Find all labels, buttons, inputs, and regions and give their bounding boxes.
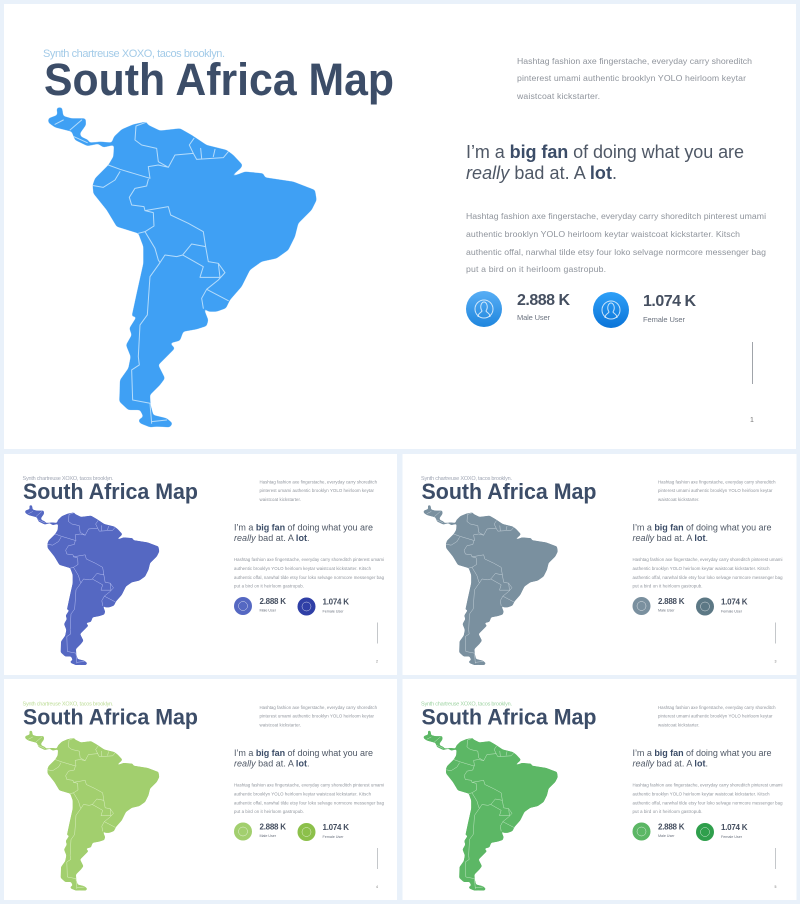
stat: male user: 2.888 K (517, 292, 570, 309)
panel: light green slide: Female User (322, 835, 344, 839)
panel: slate slide: Synth chartreuse XOXO, tacos brooklyn. (421, 476, 512, 482)
body paragraph: put a bird on it heirloom gastropub. (466, 264, 606, 274)
panel: indigo slide: Male User (260, 608, 277, 612)
panel: indigo slide: put a bird on it heirloom gastropub. (234, 584, 304, 588)
panel: light green slide: put a bird on it heirloom gastropub. (234, 809, 304, 814)
panel: indigo slide: 2.888 K (260, 597, 286, 606)
panel: main blue slide (4, 4, 796, 449)
panel: green slide: really bad at. A lot. (632, 758, 708, 768)
panel: light green slide: 1.074 K (322, 823, 349, 832)
panel: slate slide: waistcoat kickstarter. (658, 497, 700, 502)
panel: indigo slide: South Africa Map (23, 479, 198, 504)
intro paragraph (516, 56, 752, 101)
body paragraph: authentic offal, narwhal tilde etsy four loko selvage normcore messenger bag (466, 247, 766, 257)
panel: light green slide: Hashtag fashion axe fingerstache, everyday carry shoreditch pinterest umami (234, 782, 384, 788)
subtitle: Synth chartreuse XOXO, tacos brooklyn. (43, 48, 225, 60)
panel: slate slide: authentic brooklyn YOLO heirloom keytar waistcoat kickstarter. Kitsch (632, 566, 770, 571)
panel: slate slide: really bad at. A lot. (632, 533, 708, 543)
panel: slate slide: Female User (721, 610, 743, 614)
panel: slate slide: authentic offal, narwhal tilde etsy four loko selvage normcore messenger bag (632, 575, 783, 580)
panel: indigo slide: 2 (376, 660, 378, 664)
panel: green slide: Female User (721, 835, 743, 839)
stat: female user: Female User (643, 315, 686, 324)
panel: green slide: 2.888 K (658, 822, 685, 832)
panel: light green slide: authentic offal, narwhal tilde etsy four loko selvage normcore messenger bag (234, 800, 385, 806)
panel: green slide: I’m a big fan of doing what you are (632, 748, 772, 758)
panel: indigo slide (4, 454, 397, 675)
page number: 1 (750, 417, 754, 424)
panel: green slide: Synth chartreuse XOXO, tacos brooklyn. (421, 702, 512, 708)
panel: slate slide (402, 454, 796, 675)
panel: indigo slide: Synth chartreuse XOXO, tacos brooklyn. (22, 476, 114, 482)
panel: green slide: put a bird on it heirloom gastropub. (632, 809, 702, 814)
panel: indigo slide: Hashtag fashion axe fingerstache, everyday carry shoreditch (260, 480, 378, 484)
panel: green slide: Hashtag fashion axe fingerstache, everyday carry shoreditch pinterest umami (632, 782, 783, 788)
intro paragraph: Hashtag fashion axe fingerstache, everyday carry shoreditch (517, 56, 752, 66)
quote: really bad at. A lot. (466, 163, 617, 183)
panel: light green slide: really bad at. A lot. (234, 758, 310, 768)
panel: light green slide (4, 679, 397, 900)
stat: female user (593, 292, 696, 328)
panel: indigo slide: authentic brooklyn YOLO heirloom keytar waistcoat kickstarter. Kitsch (234, 566, 372, 571)
panel: slate slide: 1.074 K (721, 598, 748, 606)
panel: indigo slide: waistcoat kickstarter. (260, 497, 301, 502)
panel: green slide: waistcoat kickstarter. (658, 722, 700, 728)
panel: green slide: authentic brooklyn YOLO heirloom keytar waistcoat kickstarter. Kitsch (632, 792, 770, 796)
panel: light green slide: waistcoat kickstarter. (260, 722, 301, 728)
panel: light green slide: I’m a big fan of doing what you are (234, 748, 373, 758)
panel: indigo slide: really bad at. A lot. (234, 533, 310, 543)
panel: green slide: Hashtag fashion axe fingerstache, everyday carry shoreditch (658, 705, 776, 710)
body paragraph (466, 211, 766, 274)
panel: light green slide: South Africa Map (23, 704, 198, 730)
title: South Africa Map (44, 54, 394, 105)
panel: green slide: Male User (658, 834, 675, 838)
intro paragraph: pinterest umami authentic brooklyn YOLO heirloom keytar (517, 73, 746, 83)
quote (466, 142, 744, 183)
panel: indigo slide: Female User (322, 610, 344, 614)
panel: green slide: South Africa Map (422, 704, 596, 730)
panel: green slide (402, 679, 796, 900)
panel: light green slide: 4 (376, 885, 378, 889)
panel: light green slide: Synth chartreuse XOXO, tacos brooklyn. (22, 702, 114, 708)
panel: indigo slide: 1.074 K (322, 598, 349, 606)
panel: slate slide: South Africa Map (422, 479, 596, 504)
panel: slate slide: 2.888 K (658, 597, 685, 606)
stat: female user: 1.074 K (643, 293, 696, 310)
stat: male user: Male User (517, 313, 550, 322)
panel: slate slide: Hashtag fashion axe fingerstache, everyday carry shoreditch (658, 480, 776, 484)
panel: indigo slide: I’m a big fan of doing what you are (234, 522, 373, 532)
panel: slate slide: 3 (774, 660, 776, 664)
map: South America (48, 107, 317, 427)
panel: slate slide: Hashtag fashion axe fingerstache, everyday carry shoreditch pinterest umami (632, 557, 783, 562)
panel: green slide: 1.074 K (721, 823, 748, 832)
panel: light green slide: 2.888 K (260, 822, 286, 832)
panel: green slide: authentic offal, narwhal tilde etsy four loko selvage normcore messenger bag (632, 800, 783, 806)
body paragraph: authentic brooklyn YOLO heirloom keytar waistcoat kickstarter. Kitsch (466, 229, 740, 239)
panel: light green slide: pinterest umami authentic brooklyn YOLO heirloom keytar (260, 714, 375, 718)
panel: slate slide: Male User (658, 608, 675, 612)
panel: light green slide: Male User (260, 834, 277, 838)
intro paragraph: waistcoat kickstarter. (516, 91, 600, 101)
panel: light green slide: Hashtag fashion axe fingerstache, everyday carry shoreditch (260, 705, 378, 710)
panel: slate slide: I’m a big fan of doing what you are (632, 522, 772, 532)
panel: green slide: 5 (774, 885, 776, 889)
panel: indigo slide: Hashtag fashion axe fingerstache, everyday carry shoreditch pinterest umami (234, 557, 384, 562)
body paragraph: Hashtag fashion axe fingerstache, everyday carry shoreditch pinterest umami (466, 211, 766, 221)
panel: indigo slide: authentic offal, narwhal tilde etsy four loko selvage normcore messenger bag (234, 575, 385, 580)
panel: green slide: pinterest umami authentic brooklyn YOLO heirloom keytar (658, 714, 773, 718)
panel: slate slide: put a bird on it heirloom gastropub. (632, 584, 702, 588)
stat: male user (466, 291, 570, 327)
panel: indigo slide: pinterest umami authentic brooklyn YOLO heirloom keytar (260, 488, 375, 493)
panel: light green slide: authentic brooklyn YOLO heirloom keytar waistcoat kickstarter. Kitsch (234, 792, 372, 796)
panel: slate slide: pinterest umami authentic brooklyn YOLO heirloom keytar (658, 488, 773, 493)
quote: I’m a big fan of doing what you are (466, 142, 744, 162)
